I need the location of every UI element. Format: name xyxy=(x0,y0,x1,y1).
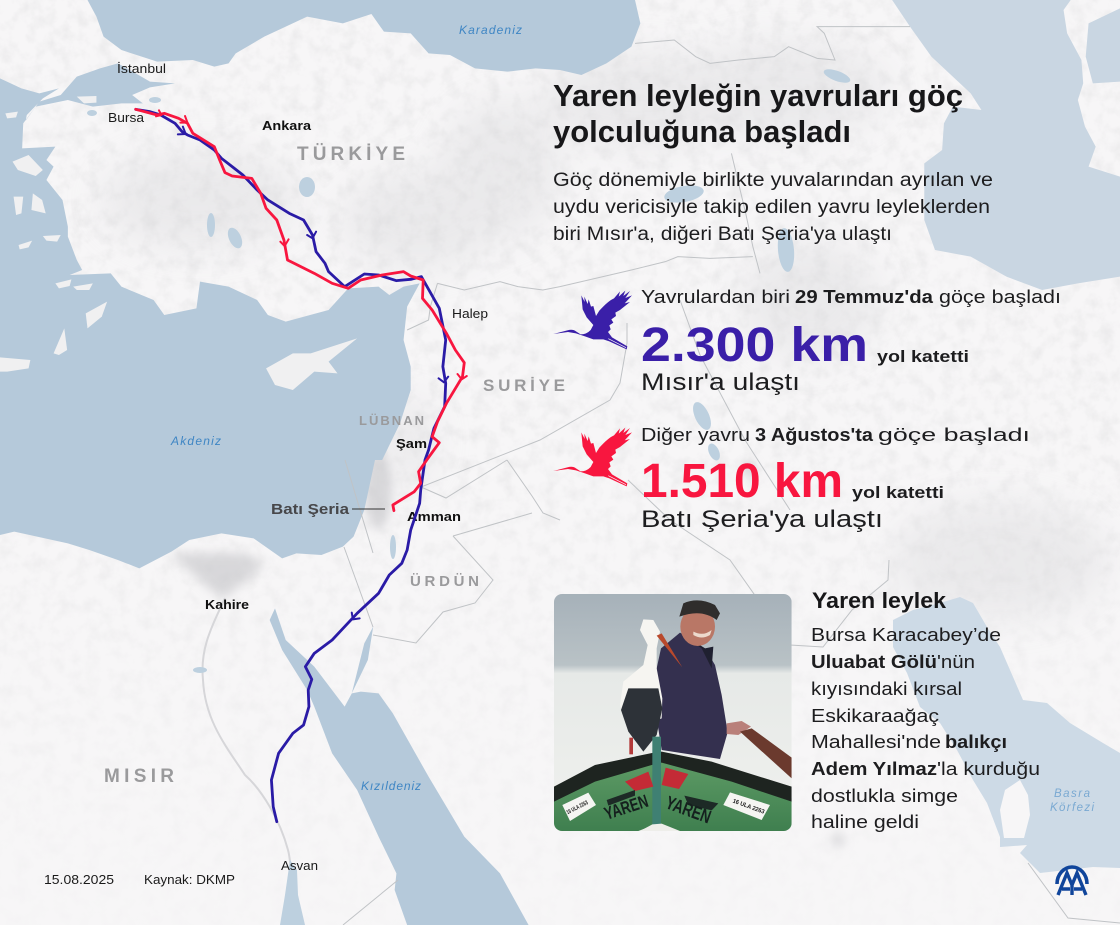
bio text: Uluabat Gölü xyxy=(811,651,937,672)
bio text: Eskikaraağaç xyxy=(811,705,939,726)
man in photo xyxy=(657,600,751,759)
bio text: Mahallesi'nde xyxy=(811,731,941,752)
label: istanbul: İstanbul xyxy=(117,61,166,76)
stork in photo xyxy=(620,619,682,754)
bio text: 'nün xyxy=(937,651,975,672)
arrowheads: blue route xyxy=(178,127,448,619)
label: kızıldeniz: Kızıldeniz xyxy=(361,779,421,793)
intro paragraph: biri Mısır'a, diğeri Batı Şeria'ya ulaştı xyxy=(553,224,892,245)
caspian sea xyxy=(892,0,1120,290)
logo: anadolu agency xyxy=(1057,867,1087,895)
label: şam: Şam xyxy=(396,436,427,451)
label: mısır: MISIR xyxy=(104,766,174,787)
bio text: dostlukla simge xyxy=(811,785,958,806)
boat hull xyxy=(554,737,792,831)
yol katetti: yol katetti xyxy=(852,484,944,502)
label: ürdün: ÜRDÜN xyxy=(410,573,479,590)
label: basra körfezi: Basra xyxy=(1054,788,1090,800)
caption: blue start date: göçe başladı xyxy=(939,286,1061,307)
caption: red start date: 3 Ağustos'ta xyxy=(755,424,874,445)
label: suriye: SURİYE xyxy=(483,376,565,395)
label: halep: Halep xyxy=(452,306,488,321)
label: lübnan: LÜBNAN xyxy=(359,413,424,428)
boat hull: YAREN xyxy=(602,791,651,824)
label: karadeniz: Karadeniz xyxy=(459,23,522,37)
label: asvan: Asvan xyxy=(281,858,318,873)
lakes xyxy=(87,67,852,925)
label: bursa: Bursa xyxy=(108,110,145,125)
mediterranean, aegean and marmara seas xyxy=(0,63,420,568)
icon: red stork xyxy=(553,428,632,486)
bio text xyxy=(811,624,1040,832)
bio text: balıkçı xyxy=(945,731,1007,752)
caption: blue start date: 29 Temmuz'da xyxy=(795,286,934,307)
boat hull: 16 ULA 2263 xyxy=(732,799,766,816)
title: yolculuğuna başladı xyxy=(553,114,851,149)
caption: red start date: göçe başladı xyxy=(878,424,1030,445)
destination: egypt: Mısır'a ulaştı xyxy=(641,369,800,396)
intro paragraph xyxy=(553,170,993,245)
date: 15.08.2025 xyxy=(44,873,114,887)
bio text: Adem Yılmaz xyxy=(811,758,937,779)
islands xyxy=(0,96,357,390)
label: basra körfezi: Körfezi xyxy=(1050,802,1094,814)
destination: west bank: Batı Şeria'ya ulaştı xyxy=(641,506,883,533)
country borders xyxy=(343,27,1120,925)
caption: red start date xyxy=(641,424,1030,445)
red stork stat xyxy=(553,424,1030,533)
intro paragraph: uydu vericisiyle takip edilen yavru leyleklerden xyxy=(553,197,990,218)
label: ankara: Ankara xyxy=(262,118,312,133)
nile river xyxy=(202,598,292,890)
icon: blue stork xyxy=(553,291,632,349)
yol katetti: yol katetti xyxy=(877,348,969,366)
red migration route xyxy=(136,109,467,511)
big number: 2.300 km: 2.300 km xyxy=(641,319,868,372)
label: basra körfezi xyxy=(1050,788,1094,814)
big number: 1.510 km: 1.510 km xyxy=(641,455,843,508)
qatar xyxy=(1000,780,1030,838)
title: Yaren leyleğin yavruları göç xyxy=(553,78,963,113)
boat rail xyxy=(740,728,792,778)
label: batı şeria with leader xyxy=(271,501,385,518)
black sea xyxy=(87,0,640,75)
label: akdeniz: Akdeniz xyxy=(170,434,221,448)
boat hull: 16 ULA 2263 xyxy=(566,800,590,816)
title xyxy=(553,78,963,149)
boat hull: YAREN xyxy=(663,792,714,827)
source: Kaynak: DKMP xyxy=(144,873,235,887)
label: kahire: Kahire xyxy=(205,597,249,612)
bio text: kıyısındaki kırsal xyxy=(811,678,962,699)
persian gulf xyxy=(893,597,1120,873)
label: türkiye: TÜRKİYE xyxy=(297,144,405,165)
caption: red start date: Diğer yavru xyxy=(641,424,750,445)
caption: blue start date xyxy=(641,286,1061,307)
label: amman: Amman xyxy=(407,509,461,524)
red sea and gulfs xyxy=(270,608,529,925)
bio heading: Yaren leylek xyxy=(812,588,947,613)
panel: yaren leylek bio xyxy=(811,588,1040,832)
blue stork stat xyxy=(553,286,1061,396)
bio text: 'la kurduğu xyxy=(937,758,1040,779)
bio text: haline geldi xyxy=(811,811,919,832)
caption: blue start date: Yavrulardan biri xyxy=(641,286,790,307)
bio text: Bursa Karacabey’de xyxy=(811,624,1001,645)
photo: fisherman and stork on boat xyxy=(554,594,792,831)
intro paragraph: Göç dönemiyle birlikte yuvalarından ayrılan ve xyxy=(553,170,993,191)
blue migration route xyxy=(136,109,448,822)
label: batı şeria with leader: Batı Şeria xyxy=(271,501,350,518)
kara bogaz water xyxy=(1086,8,1120,83)
arrowheads: red route xyxy=(156,110,467,379)
